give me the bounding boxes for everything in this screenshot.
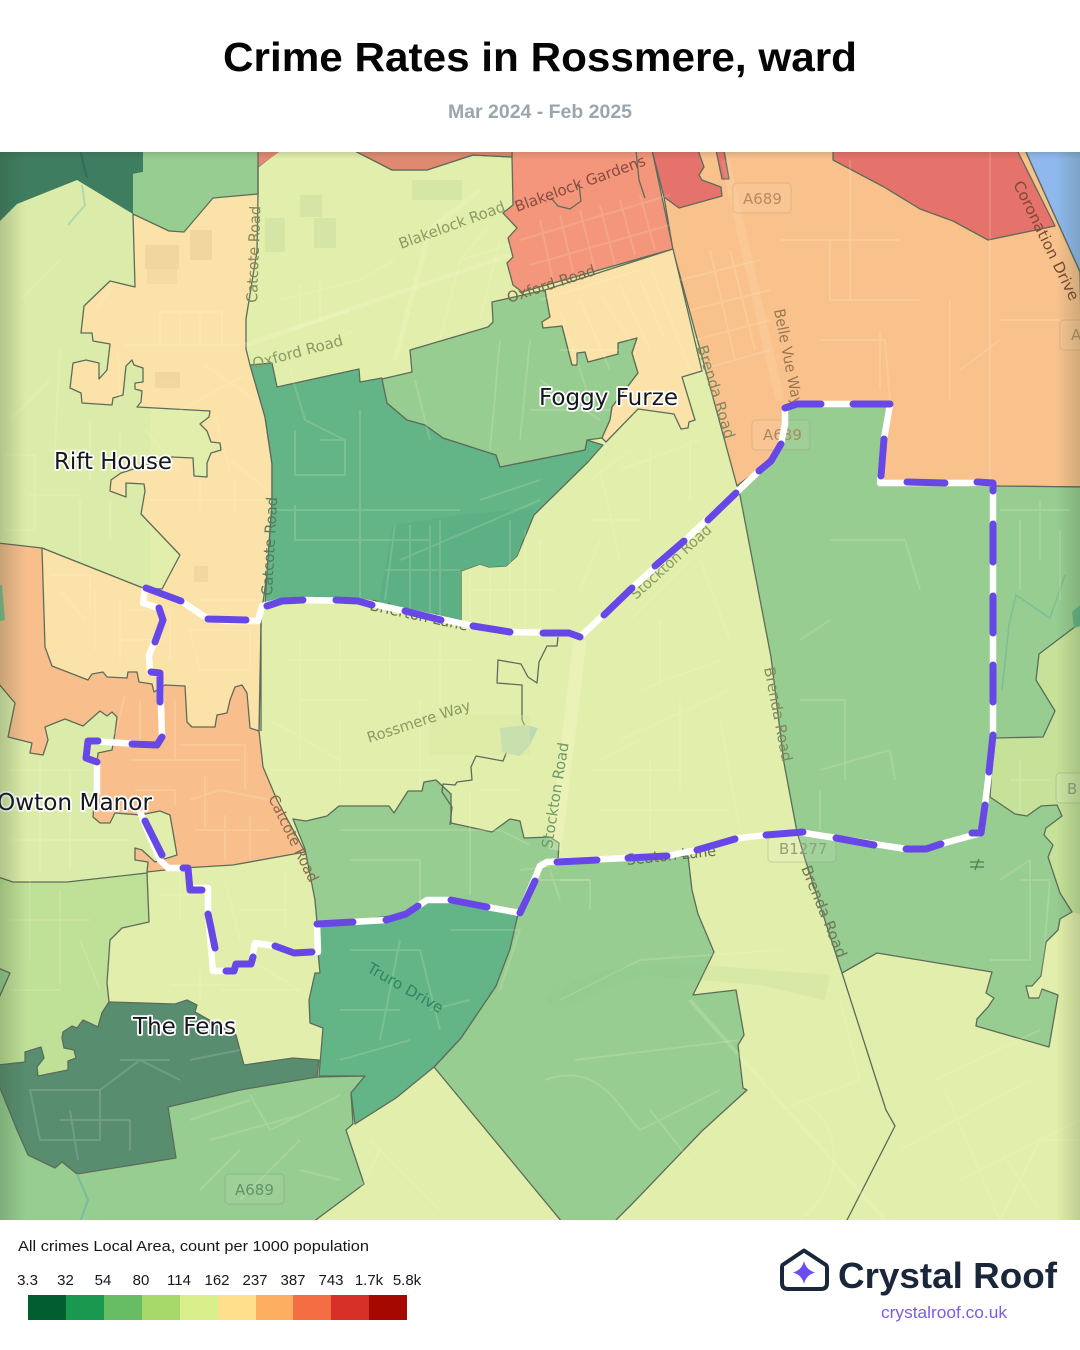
road label: Brierton Lane: Brierton Lane [368, 596, 470, 635]
region: sea [1025, 150, 1080, 278]
legend values: 5.8k [393, 1272, 422, 1289]
shield: A689 centre: A689 [763, 426, 802, 444]
region: green east edge [1072, 606, 1080, 628]
legend values: 162 [204, 1272, 230, 1289]
road label: Catcote Road lower: Catcote Road [258, 496, 281, 596]
faint building and park patches [145, 230, 212, 582]
region: salmon top band [258, 150, 512, 170]
boundary lines [258, 150, 895, 1222]
road label: Catcote Road south: Catcote Road [264, 792, 322, 885]
shield: A689 north [733, 183, 791, 213]
region: medium green south-west [0, 1076, 365, 1222]
legend [17, 1238, 422, 1320]
legend values: 237 [242, 1272, 268, 1289]
place label: Rift House: Rift House [54, 449, 172, 475]
road label: Belle Vue Way: Belle Vue Way [770, 307, 806, 407]
shield: B edge [1056, 773, 1080, 803]
legend values: 387 [280, 1272, 306, 1289]
region: orange Owton [0, 543, 305, 872]
road label: Oxford Road east: Oxford Road [505, 261, 598, 307]
regions: choropleth areas [0, 150, 1080, 1222]
region: light green east [990, 620, 1080, 915]
region: green central [250, 363, 603, 620]
road label: Oxford Road west: Oxford Road [250, 331, 345, 373]
shield: A689 south: A689 [235, 1181, 274, 1199]
shield: B1277: B1277 [779, 840, 827, 858]
region: dark green The Fens [0, 1000, 319, 1174]
road label: Brenda Road middle: Brenda Road [760, 665, 796, 763]
shield: A edge [1060, 320, 1080, 350]
water features: pond and streams [68, 150, 1065, 1222]
choropleth map panel [0, 150, 1080, 1222]
map edge vignette [0, 152, 1080, 1220]
legend values: 3.3 [17, 1272, 38, 1289]
title: Crime Rates in Rossmere, ward [223, 34, 857, 80]
subtitle: date range: Mar 2024 - Feb 2025 [448, 102, 632, 123]
faint golf course shading [702, 966, 830, 1000]
road label: Stockton Road diagonal: Stockton Road [627, 521, 715, 603]
road label: Stockton Road vertical: Stockton Road [538, 741, 573, 850]
road label: Brenda Road north: Brenda Road [693, 343, 739, 441]
route: purple dashes [86, 404, 993, 971]
region: red north-east [833, 150, 1055, 240]
legend title: All crimes Local Area, count per 1000 population [18, 1238, 369, 1255]
region: medium green Foggy Furze [382, 290, 638, 467]
legend values: 54 [95, 1272, 111, 1289]
map base: yellow-green areas [0, 152, 1080, 1220]
legend values [17, 1272, 422, 1289]
place label: Foggy Furze: Foggy Furze [539, 385, 678, 411]
region: red strip [716, 150, 729, 179]
icon: railway station [970, 859, 984, 870]
legend values: 32 [57, 1272, 74, 1289]
region: cream Foggy Furze [542, 249, 702, 442]
region: dark green north-west [0, 150, 143, 223]
region: medium green east [738, 404, 1080, 1047]
route: white underlay [86, 404, 993, 971]
region: red central north [652, 150, 722, 208]
road label: Catcote Road upper: Catcote Road [243, 206, 264, 303]
legend values: 114 [167, 1272, 191, 1289]
street network [5, 150, 1080, 1220]
shield: B1277 [768, 835, 836, 862]
road label: Truro Drive: Truro Drive [363, 958, 447, 1017]
road label: Blakelock Gardens: Blakelock Gardens [512, 152, 648, 216]
ward boundary route [86, 404, 993, 971]
road label: Coronation Drive: Coronation Drive [1009, 178, 1080, 303]
region: green central darker estate [448, 542, 522, 620]
place label: Owton Manor: Owton Manor [0, 790, 153, 816]
legend values: 80 [133, 1272, 149, 1289]
shield: B edge: B [1067, 780, 1077, 798]
region: medium green north [133, 150, 258, 232]
legend colour scale [28, 1295, 407, 1320]
logo: Crystal Roof [782, 1250, 1058, 1322]
website link: crystalroof.co.uk [881, 1303, 1008, 1322]
legend values: 743 [318, 1272, 344, 1289]
region: salmon Blakelock [503, 150, 673, 292]
shield: A689 south [225, 1174, 284, 1204]
road labels [243, 152, 1080, 1017]
legend values: 1.7k [355, 1272, 384, 1289]
road label: Seaton Lane: Seaton Lane [626, 842, 717, 869]
road label: Brenda Road south: Brenda Road [797, 863, 851, 960]
logo wordmark: Crystal Roof [838, 1255, 1058, 1296]
region: green west sliver [0, 968, 10, 1000]
region: cream Rift House [42, 194, 272, 731]
icon: house with star [782, 1250, 827, 1289]
region: green west edge [0, 585, 5, 622]
region: green Truro Drive [309, 900, 518, 1124]
region: light green Fens west [0, 873, 149, 1090]
road label: Rossmere Way: Rossmere Way [365, 696, 473, 747]
region: orange east [652, 150, 1080, 487]
road shields [225, 183, 1080, 1204]
region: medium green Seaton [293, 780, 747, 1222]
shield: A689 centre [752, 420, 810, 450]
place label: The Fens: The Fens [132, 1014, 236, 1040]
shield: A689 north: A689 [743, 190, 782, 208]
road label: Blakelock Road: Blakelock Road [396, 198, 508, 253]
